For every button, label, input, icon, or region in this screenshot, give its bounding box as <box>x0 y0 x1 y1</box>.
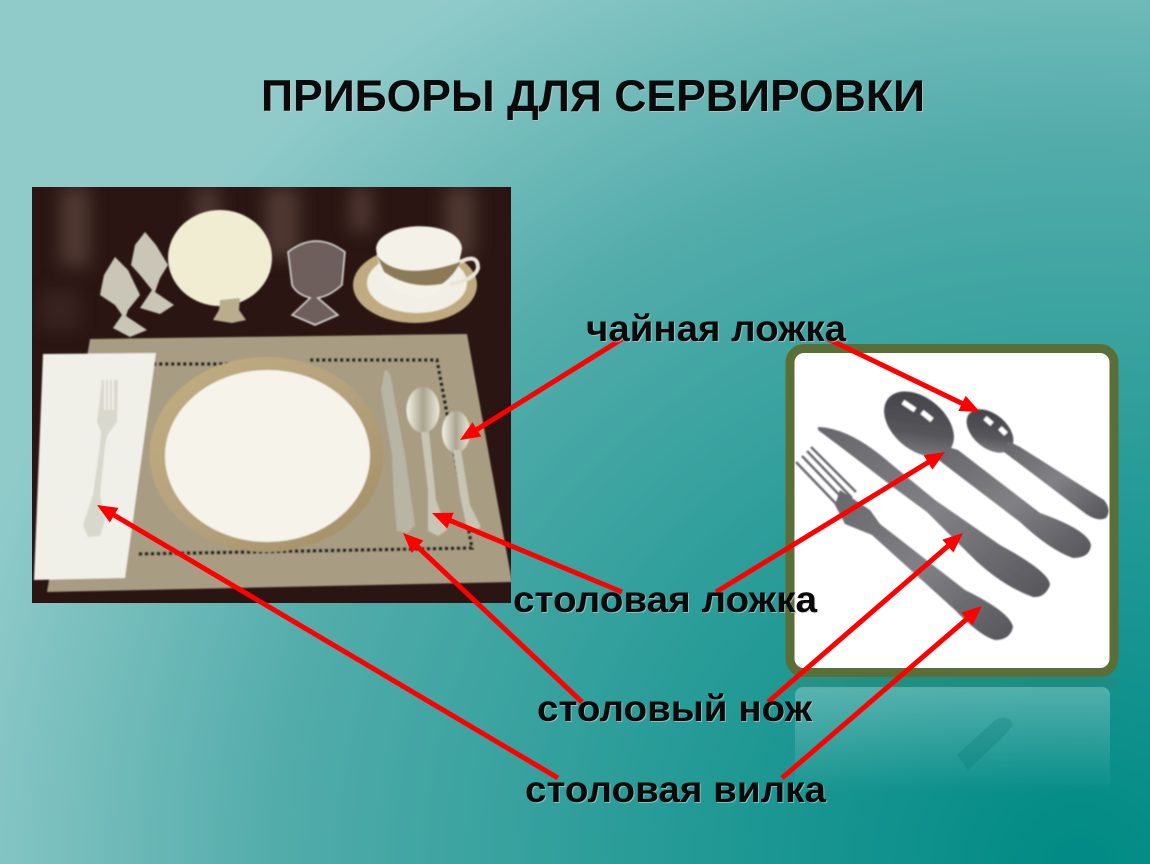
arrow: knife right <box>768 540 955 702</box>
arrow: fork right <box>782 612 974 778</box>
vase <box>213 298 246 323</box>
arrows <box>106 339 974 778</box>
fork in photo <box>83 380 118 537</box>
tablespoon in photo <box>406 387 447 536</box>
flowers <box>168 210 272 306</box>
teaspoon <box>958 401 1109 519</box>
glass <box>288 241 345 325</box>
arrow: teaspoon right <box>828 339 971 408</box>
cup <box>376 226 478 297</box>
label: table fork: столовая вилка <box>525 769 826 810</box>
arrow: teaspoon left <box>468 339 622 435</box>
panel: table setting photo <box>32 187 512 603</box>
label: table knife: столовый нож <box>537 688 813 729</box>
reflection <box>786 678 1118 792</box>
placemat <box>47 334 512 592</box>
napkin <box>34 353 156 580</box>
knife in photo <box>381 370 415 533</box>
tablespoon <box>872 378 1091 558</box>
panel: cutlery photo <box>790 348 1114 672</box>
dinner plate <box>150 357 384 552</box>
teaspoon in photo <box>442 411 481 532</box>
title: ПРИБОРЫ ДЛЯ СЕРВИРОВКИ <box>261 72 925 121</box>
arrow: tablespoon right <box>716 457 936 592</box>
label: tablespoon: столовая ложка <box>513 579 817 620</box>
saucer <box>353 247 477 323</box>
arrow: fork left <box>106 510 558 778</box>
knife <box>818 427 1050 597</box>
salt shakers <box>100 232 174 337</box>
spoon highlights <box>903 402 1006 434</box>
arrow: tablespoon left <box>441 517 622 592</box>
fork <box>796 447 1013 640</box>
label: teaspoon: чайная ложка <box>586 308 846 349</box>
arrow: knife left <box>410 540 582 702</box>
stitched line <box>135 360 472 554</box>
